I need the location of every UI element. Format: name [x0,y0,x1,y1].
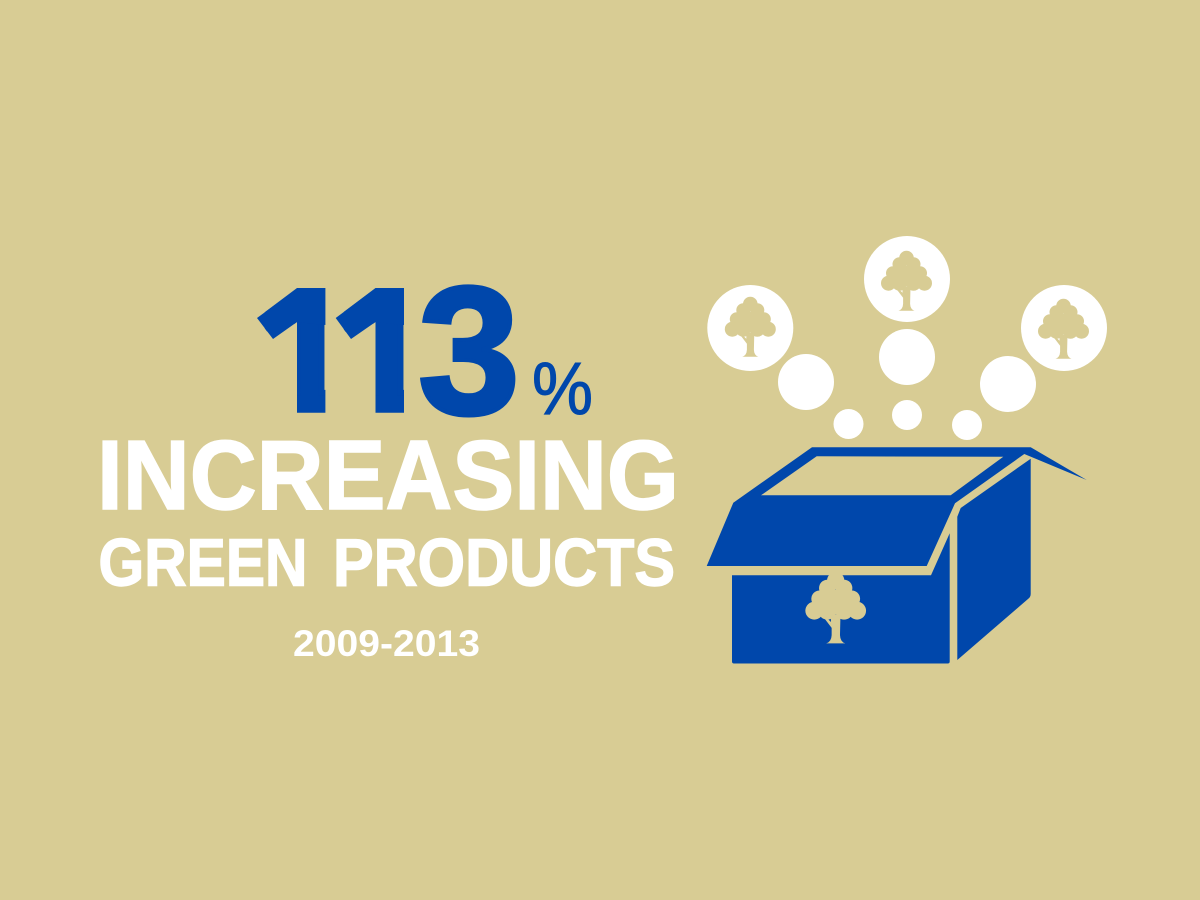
box lid flaps [707,447,1087,566]
icon: tree bubble left [707,285,793,371]
box side panel [957,459,1031,660]
headline number: 113% [240,248,593,452]
heading: INCREASING: INCREASING [97,420,679,530]
headline number: 113%: 3 [418,248,520,452]
icon: tree on box front [805,572,866,643]
headline number: 113%: % [532,347,593,430]
heading: GREEN PRODUCTS [98,526,675,600]
headline number: 113%: 1 [334,250,434,449]
rising bubbles [778,329,1036,440]
icon: tree bubble centre [864,236,950,322]
date range: 2009-2013 [293,623,480,664]
headline number: 113%: 1 [256,250,354,449]
icon: tree bubble right [1021,285,1107,371]
heading: GREEN PRODUCTS: PRODUCTS [333,526,675,600]
icon: open box [707,447,1087,664]
box front panel [732,533,950,664]
heading: GREEN PRODUCTS: GREEN [98,526,308,600]
